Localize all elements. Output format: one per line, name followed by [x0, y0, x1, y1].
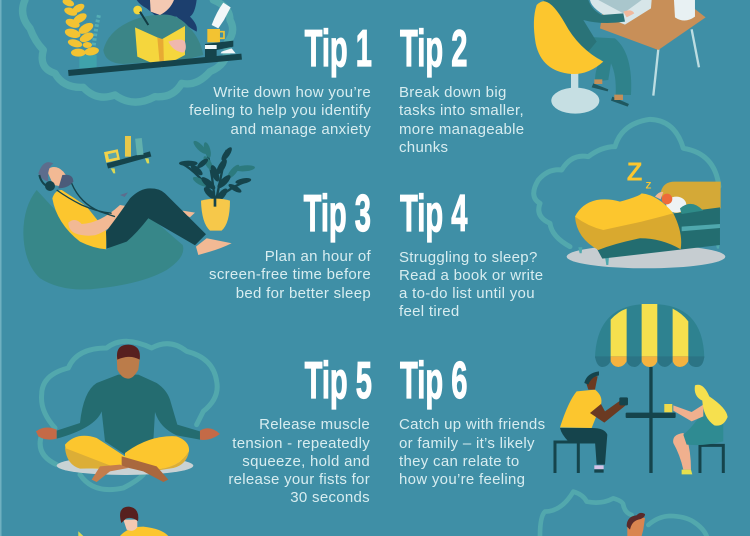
pole and table: [626, 367, 676, 473]
potted plant: [179, 139, 255, 231]
text: Tip 1 description: feeling to help you identify: [189, 102, 371, 119]
text: Tip 5 description: release your fists for: [228, 471, 370, 488]
cloud outline: [40, 341, 217, 490]
mug and paper: [205, 3, 236, 59]
heading: Tip 1: Tip 1: [305, 19, 372, 77]
open book: [135, 26, 186, 67]
heading: Tip 6: Tip 6: [400, 351, 467, 409]
yellow chair: [534, 1, 603, 114]
text: Tip 6 description: how you’re feeling: [399, 471, 525, 488]
trousers: [106, 188, 206, 249]
torso and arms: [57, 375, 200, 455]
text: Tip 3 description: bed for better sleep: [236, 285, 371, 302]
floor rug: [567, 245, 725, 268]
illustration: bottom-right person and cloud: [540, 492, 707, 536]
illustration: man relaxing on a beanbag: [23, 136, 255, 290]
text: Tip 3 description: Plan an hour of: [265, 248, 372, 265]
thought cloud outline: [23, 0, 233, 102]
text: Tip 4 description: Struggling to sleep?: [399, 249, 538, 266]
laptop: [590, 0, 652, 25]
text: Tip 2 description: tasks into smaller,: [399, 102, 524, 119]
feet: [122, 456, 168, 482]
person body and hair: [103, 0, 203, 64]
mat: [57, 456, 193, 475]
head with headphones and beard: [38, 162, 128, 217]
text: Tip 4 description: a to-do list until you: [399, 285, 535, 302]
pillow and head: [666, 197, 686, 213]
yellow blanket: [575, 207, 681, 250]
desk: [600, 0, 706, 96]
man seated: [560, 371, 628, 473]
torso and arm: [543, 0, 625, 52]
illustration: person working at a desk: [534, 0, 706, 114]
text: Tip 5 description: squeeze, hold and: [242, 453, 370, 470]
heading: Tip 3: Tip 3: [304, 184, 371, 242]
arm: [68, 205, 130, 236]
foot: [196, 238, 232, 255]
left stool: [555, 442, 597, 473]
shelf: [68, 57, 242, 73]
yellow shirt: [52, 190, 107, 249]
text: Tip 2 description: Break down big: [399, 84, 507, 101]
text: Tip 6 description: they can relate to: [399, 453, 519, 470]
text: Tip 6 description: Catch up with friends: [399, 416, 545, 433]
mug: [674, 0, 695, 21]
yellow legs: [65, 436, 125, 470]
illustration: person asleep in bed: Z: [646, 180, 652, 190]
text: Tip 2 description: chunks: [399, 139, 448, 156]
illustration: bottom-left person in yellow: [78, 507, 168, 536]
legs: [583, 37, 631, 95]
text: Tip 5 description: 30 seconds: [290, 489, 370, 506]
illustration: friends at a cafe table: [555, 304, 728, 474]
text: Tip 1 description: and manage anxiety: [230, 121, 371, 138]
text: Tip 1 description: Write down how you’re: [213, 84, 371, 101]
right stool: [700, 445, 723, 473]
text: Tip 6 description: or family – it’s likely: [399, 435, 535, 452]
text: Tip 3 description: screen-free time before: [209, 266, 371, 283]
text: Tip 4 description: Read a book or write: [399, 267, 543, 284]
woman seated: [664, 385, 728, 474]
heading: Tip 2: Tip 2: [400, 19, 467, 77]
illustration: woman writing in a journal: [23, 0, 242, 102]
heading: Tip 5: Tip 5: [305, 351, 372, 409]
bed frame: [578, 182, 721, 265]
Z letters: Z: [627, 157, 643, 187]
far foot: [183, 211, 195, 217]
text: Tip 5 description: tension - repeatedly: [232, 435, 370, 452]
beanbag: [23, 190, 183, 290]
wall shelf with books: [104, 136, 151, 173]
umbrella: [595, 304, 704, 367]
sleep cloud outline: [534, 119, 719, 247]
illustration: person asleep in bed: [534, 119, 725, 268]
text: Tip 4 description: feel tired: [399, 303, 460, 320]
text: Tip 2 description: more manageable: [399, 121, 524, 138]
heading: Tip 4: Tip 4: [400, 184, 468, 242]
hands: [36, 428, 57, 440]
head: [117, 356, 140, 379]
illustration: man meditating cross-legged: [36, 341, 220, 490]
plant: [62, 0, 100, 68]
text: Tip 5 description: Release muscle: [259, 416, 370, 433]
